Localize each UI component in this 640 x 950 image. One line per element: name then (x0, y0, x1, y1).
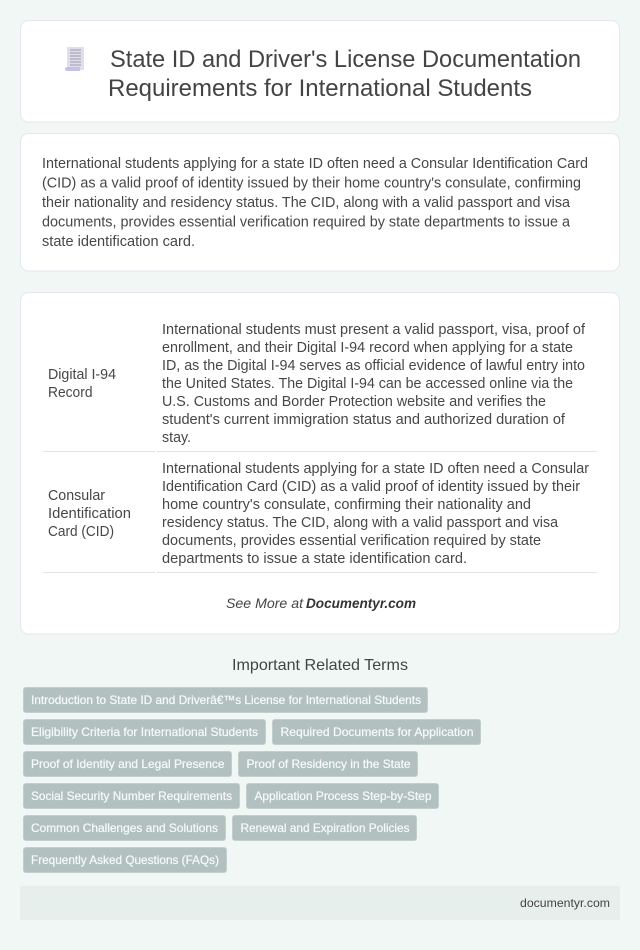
chip (24, 848, 226, 872)
chip: Renewal and Expiration Policies (240, 821, 410, 835)
chip (24, 752, 232, 776)
label: Consular Identification Card (CID): Card (CID) (48, 524, 114, 540)
label: Digital I-94 Record (48, 367, 116, 401)
chip (24, 784, 240, 808)
text block: Digital I-94 description: International students must present a valid passport, visa, proof of (162, 322, 585, 338)
text block: Consular ID description: departments to issue a state identification card. (162, 551, 467, 567)
footer (20, 886, 620, 920)
text block: introduction paragraph (42, 156, 588, 250)
text block: Digital I-94 description: the United States. The Digital I-94 can be accessed online via the (162, 376, 573, 392)
label: Digital I-94 Record: Digital I-94 (48, 367, 116, 383)
text block: introduction paragraph: International students applying for a state ID often need a Consular Identification Card (42, 156, 588, 172)
chip: Eligibility Criteria for International Students (31, 725, 258, 739)
text block: Consular ID description: home country's consulate, confirming their nationality and (162, 497, 531, 513)
text block: Consular ID description (162, 461, 589, 567)
chip (232, 816, 416, 840)
chip: Frequently Asked Questions (FAQs) (31, 853, 219, 867)
text block: Digital I-94 description: student's current immigration status and authorized duration of (162, 412, 565, 428)
chip (238, 752, 418, 776)
see more link: Documentyr.com (306, 595, 416, 611)
chip (24, 720, 266, 744)
text block: Consular ID description: Identification Card (CID) as a valid proof of identity issued by their (162, 479, 580, 495)
icon: document (65, 47, 84, 71)
text block: introduction paragraph: documents, provides essential verification required by state departments to issue a (42, 214, 570, 230)
text block: Consular ID description: residency status. The CID, along with a valid passport and visa (162, 515, 558, 531)
chip: Application Process Step-by-Step (254, 789, 432, 803)
text block: Digital I-94 description: stay. (162, 430, 191, 446)
text block: Digital I-94 description (162, 322, 585, 446)
chip (272, 720, 480, 744)
chip: Social Security Number Requirements (31, 789, 232, 803)
text block: introduction paragraph: state identification card. (42, 234, 195, 250)
panel: documents table (20, 292, 620, 634)
chip: Common Challenges and Solutions (31, 821, 218, 835)
see more link: See More at (226, 595, 304, 611)
chip: Proof of Identity and Legal Presence (31, 757, 225, 771)
text block: Digital I-94 description: U.S. Customs and Border Protection website and verifies the (162, 394, 546, 410)
title: State ID and Driver's License Documentation (110, 46, 581, 73)
chip (246, 784, 438, 808)
text block: Consular ID description: documents, provides essential verification required by state (162, 533, 541, 549)
label: Consular Identification Card (CID): Consular (48, 488, 105, 504)
panel: introduction (20, 134, 620, 271)
panel: title card (20, 20, 620, 122)
text block: Digital I-94 description: enrollment, and their Digital I-94 record when applying for a state (162, 340, 573, 356)
heading: related terms: Important Related Terms (232, 657, 408, 674)
chip: Introduction to State ID and Driverâ€™s License for International Students (31, 693, 421, 707)
footer: documentyr.com (520, 896, 610, 910)
title: Requirements for International Students (108, 75, 532, 102)
text block: Digital I-94 description: ID, as the Digital I-94 serves as official evidence of lawful entry into (162, 358, 585, 374)
chip: Required Documents for Application (280, 725, 474, 739)
label: Consular Identification Card (CID): Identification (48, 506, 131, 522)
title (108, 46, 581, 102)
panel: related term chips (24, 688, 480, 872)
chip: Proof of Residency in the State (246, 757, 411, 771)
label: Digital I-94 Record: Record (48, 385, 93, 401)
text block: introduction paragraph: their nationality and residency status. The CID, along with a valid passport and visa (42, 195, 570, 211)
row: Consular Identification Card (43, 461, 597, 573)
label: Consular Identification Card (CID) (48, 488, 131, 540)
text block: Consular ID description: International students applying for a state ID often need a Consular (162, 461, 589, 477)
chip (24, 688, 428, 712)
see more link (226, 595, 416, 611)
text block: introduction paragraph: (CID) as a valid proof of identity issued by their home country's consulate, confirming (42, 176, 581, 192)
chip (24, 816, 226, 840)
row: Digital I-94 Record (43, 322, 597, 452)
